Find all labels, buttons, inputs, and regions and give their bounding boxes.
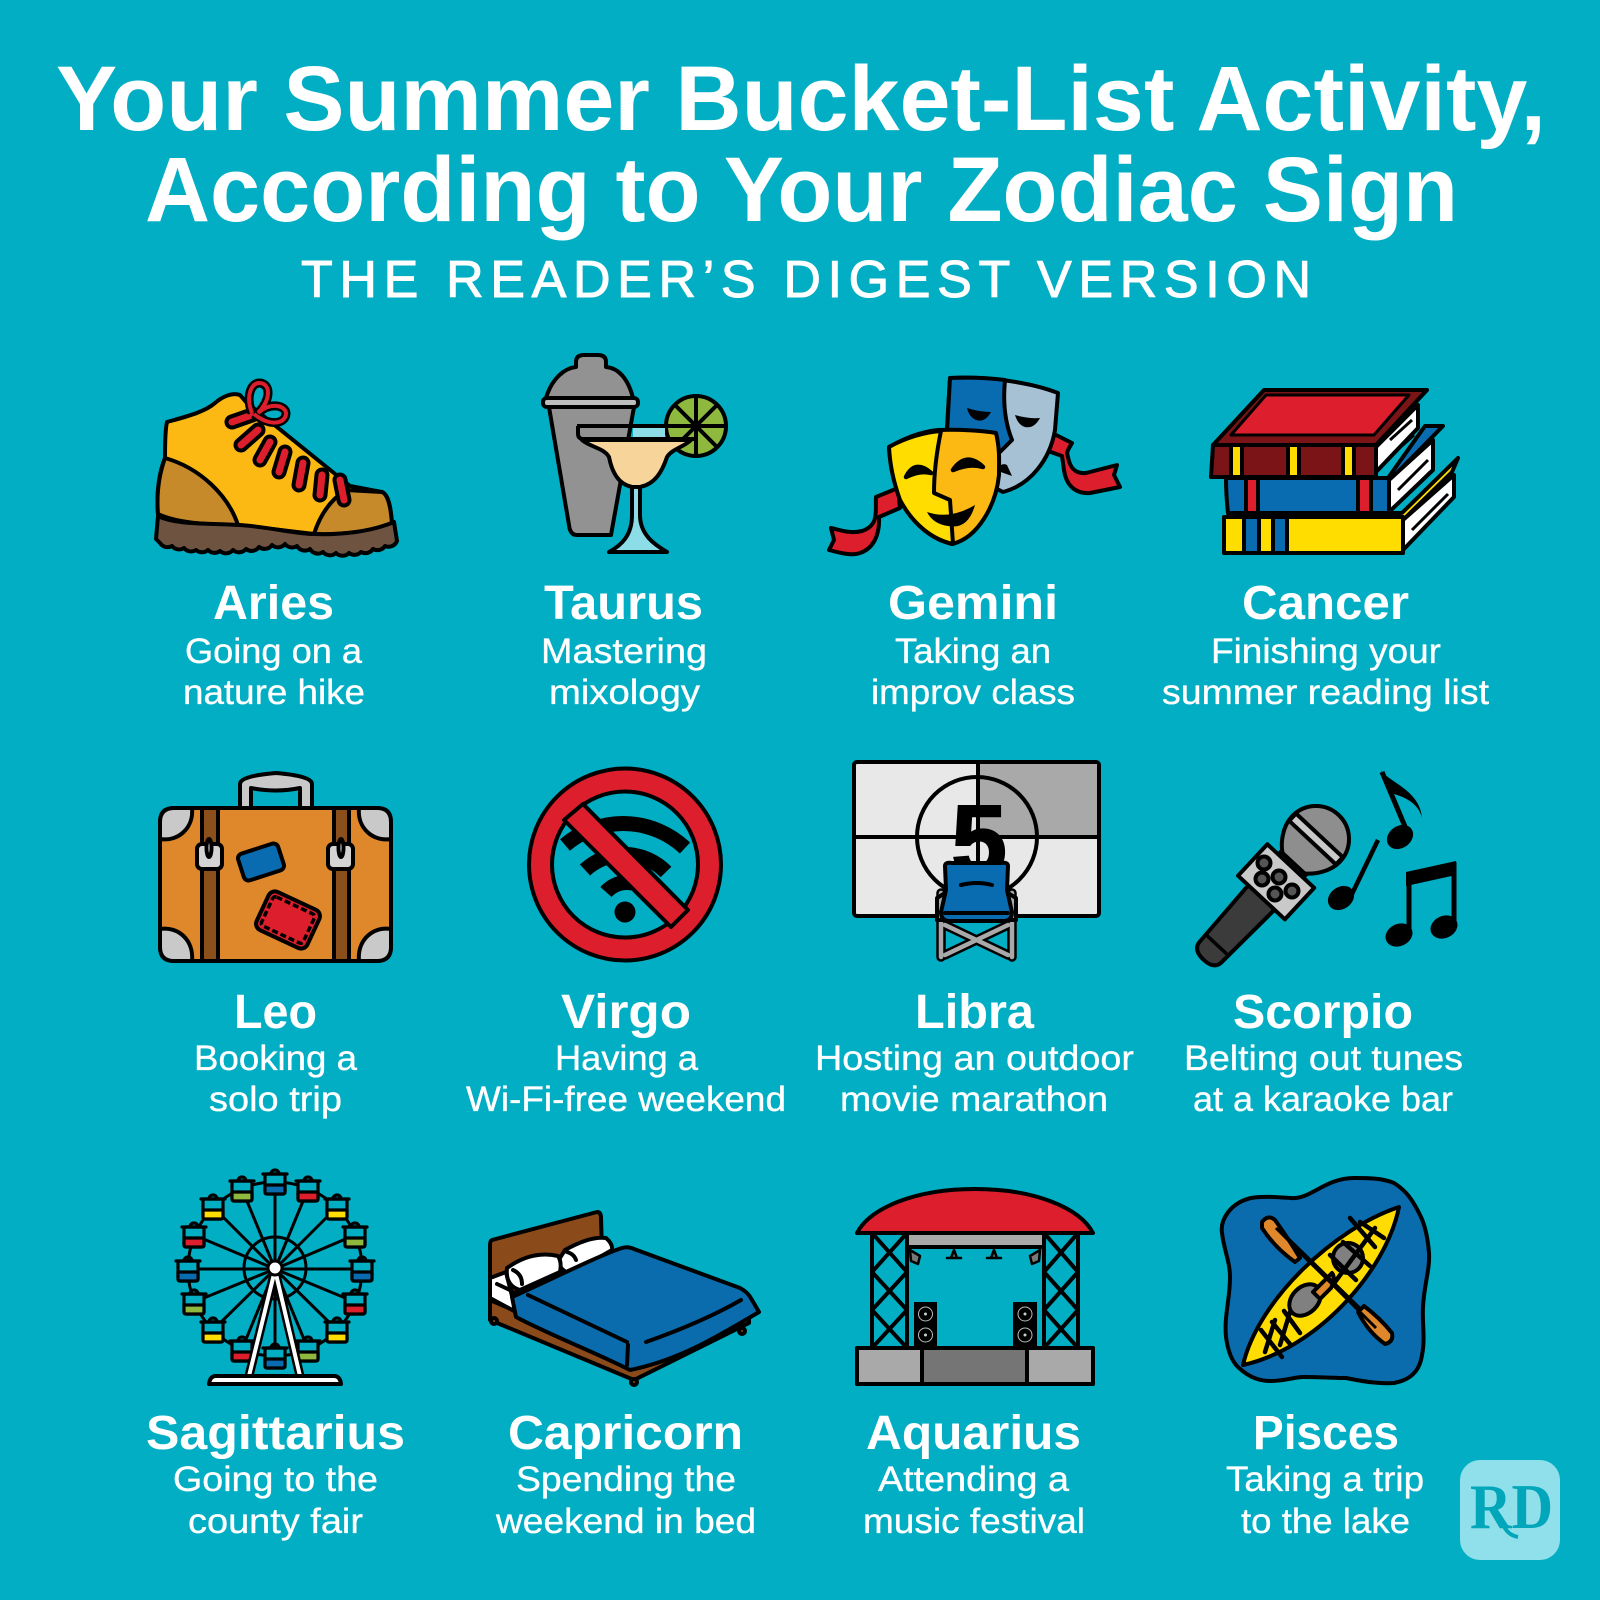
sign name: Aquarius: Aquarius bbox=[866, 1407, 1081, 1460]
activity: Cancer bbox=[1162, 632, 1489, 712]
panel: Scorpio bbox=[1179, 770, 1463, 1119]
sign name: Virgo: Virgo bbox=[561, 986, 691, 1039]
activity: Capricorn: weekend in bed bbox=[495, 1502, 756, 1541]
panel: Sagittarius bbox=[146, 1170, 405, 1541]
activity: Gemini: improv class bbox=[871, 673, 1075, 712]
title: Your Summer Bucket-List Activity, bbox=[56, 48, 1546, 150]
icon: bed bbox=[490, 1212, 759, 1385]
sign name: Sagittarius: Sagittarius bbox=[146, 1407, 405, 1460]
sign name: Taurus: Taurus bbox=[544, 577, 703, 630]
activity: Pisces bbox=[1226, 1460, 1424, 1541]
activity: Aries: nature hike bbox=[183, 673, 365, 712]
activity: Scorpio bbox=[1184, 1039, 1463, 1119]
sign name: Cancer: Cancer bbox=[1242, 577, 1409, 630]
activity: Gemini bbox=[871, 632, 1075, 712]
activity: Scorpio: Belting out tunes bbox=[1184, 1039, 1463, 1078]
title: According to Your Zodiac Sign bbox=[145, 139, 1458, 241]
activity: Leo bbox=[194, 1039, 358, 1119]
icon: concert stage bbox=[857, 1189, 1093, 1384]
panel: Pisces bbox=[1222, 1178, 1429, 1541]
logo: RD badge: RD bbox=[1470, 1471, 1553, 1542]
sign name: Libra: Libra bbox=[915, 986, 1034, 1039]
panel: Aries bbox=[156, 383, 397, 712]
title bbox=[56, 48, 1546, 241]
activity: Leo: solo trip bbox=[209, 1080, 342, 1119]
sign name: Leo: Leo bbox=[234, 986, 317, 1039]
activity: Leo: Booking a bbox=[194, 1039, 358, 1078]
activity: Sagittarius: county fair bbox=[188, 1502, 363, 1541]
panel: Aquarius bbox=[857, 1189, 1093, 1541]
sign name: Aries: Aries bbox=[213, 577, 334, 630]
activity: Gemini: Taking an bbox=[895, 632, 1051, 671]
activity: Aries bbox=[183, 632, 365, 712]
panel: Libra bbox=[815, 762, 1134, 1119]
activity: Sagittarius: Going to the bbox=[173, 1460, 378, 1499]
icon: shaker and margarita bbox=[543, 355, 726, 552]
activity: Capricorn: Spending the bbox=[516, 1460, 736, 1499]
icon: movie countdown screen and chair bbox=[854, 762, 1099, 957]
logo: RD badge bbox=[1460, 1460, 1560, 1560]
activity: Aquarius: music festival bbox=[863, 1502, 1085, 1541]
activity: Cancer: Finishing your bbox=[1211, 632, 1441, 671]
panel: Gemini bbox=[829, 378, 1120, 712]
sign name: Gemini: Gemini bbox=[888, 577, 1058, 630]
activity: Aquarius bbox=[863, 1460, 1085, 1541]
panel: Virgo bbox=[466, 769, 786, 1119]
activity: Libra: Hosting an outdoor bbox=[815, 1039, 1134, 1078]
activity: Capricorn bbox=[495, 1460, 756, 1541]
activity: Virgo: Wi-Fi-free weekend bbox=[466, 1080, 786, 1119]
activity: Cancer: summer reading list bbox=[1162, 673, 1489, 712]
activity: Scorpio: at a karaoke bar bbox=[1193, 1080, 1453, 1119]
activity: Libra bbox=[815, 1039, 1134, 1119]
icon: microphone and music notes bbox=[1179, 770, 1461, 982]
activity: Pisces: Taking a trip bbox=[1226, 1460, 1424, 1499]
activity: Taurus: mixology bbox=[549, 673, 701, 712]
activity: Libra: movie marathon bbox=[840, 1080, 1108, 1119]
icon: theater masks bbox=[829, 378, 1120, 554]
subtitle: THE READER’S DIGEST VERSION bbox=[301, 251, 1311, 309]
activity: Virgo: Having a bbox=[555, 1039, 699, 1078]
sign name: Pisces: Pisces bbox=[1253, 1407, 1399, 1460]
activity: Taurus bbox=[541, 632, 707, 712]
icon: no Wi-Fi sign bbox=[529, 769, 721, 961]
sign name: Scorpio: Scorpio bbox=[1233, 986, 1413, 1039]
activity: Pisces: to the lake bbox=[1241, 1502, 1410, 1541]
activity: Taurus: Mastering bbox=[541, 632, 707, 671]
activity: Aries: Going on a bbox=[185, 632, 363, 671]
icon: Ferris wheel bbox=[176, 1170, 374, 1384]
panel: Taurus bbox=[541, 355, 726, 712]
icon: kayak on lake bbox=[1222, 1178, 1429, 1383]
panel: Leo bbox=[160, 773, 391, 1119]
activity: Aquarius: Attending a bbox=[878, 1460, 1070, 1499]
icon: movie countdown screen and chair: 5 bbox=[951, 785, 1007, 897]
icon: stack of books bbox=[1211, 390, 1458, 553]
panel: Capricorn bbox=[490, 1212, 759, 1541]
icon: hiking boot bbox=[156, 383, 397, 556]
activity: Virgo bbox=[466, 1039, 786, 1119]
icon: suitcase bbox=[160, 773, 391, 961]
activity: Sagittarius bbox=[173, 1460, 378, 1541]
panel: Cancer bbox=[1162, 390, 1489, 712]
sign name: Capricorn: Capricorn bbox=[508, 1407, 743, 1460]
